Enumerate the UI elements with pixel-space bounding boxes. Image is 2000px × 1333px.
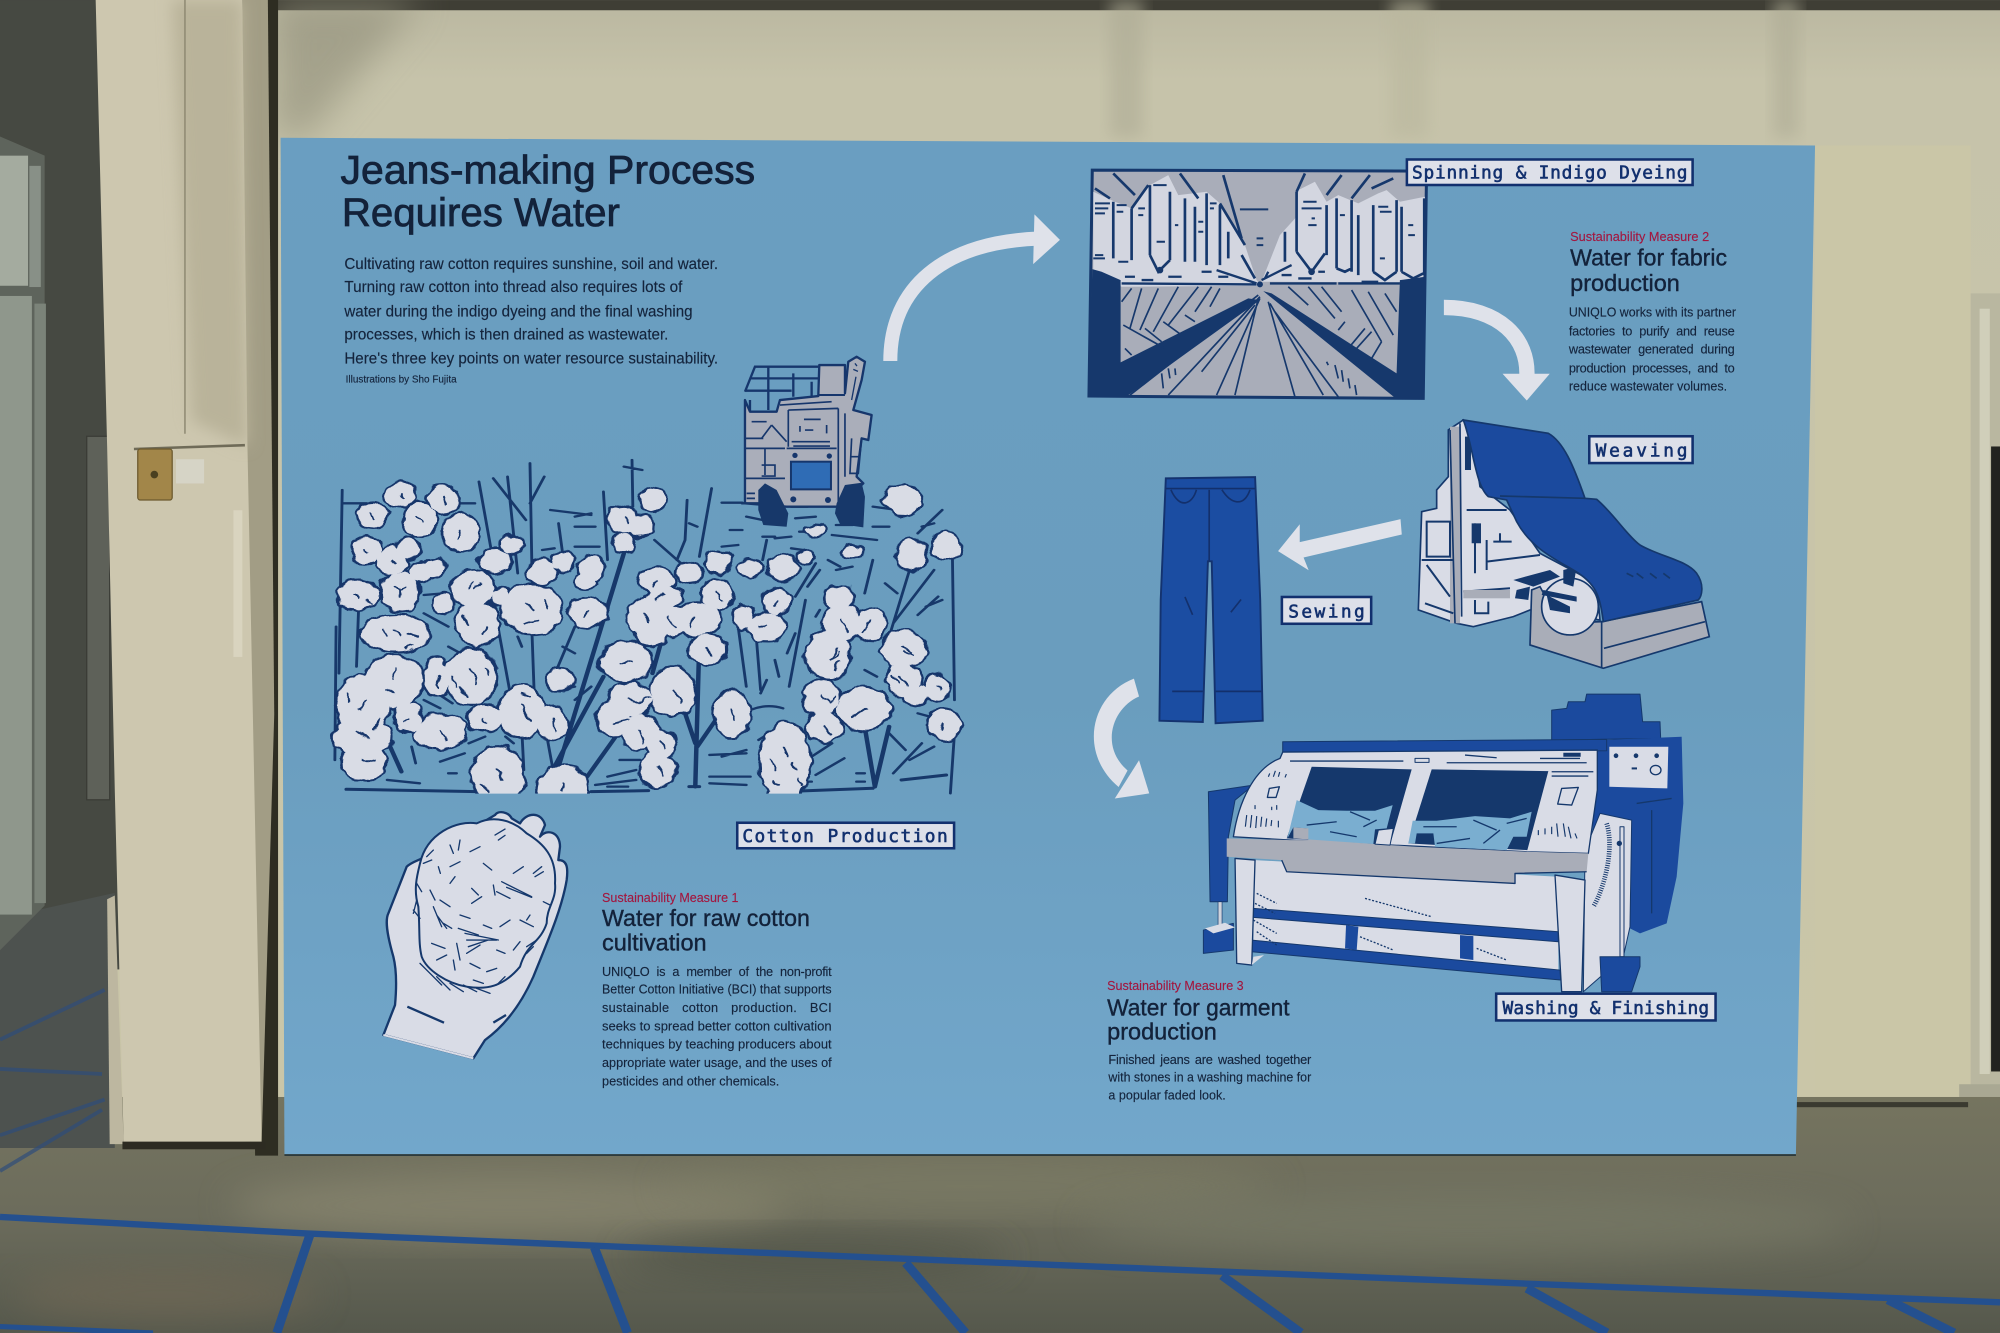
intro text: water during the indigo dyeing and the final washing xyxy=(343,303,693,320)
arrow: weaving to sewing xyxy=(1278,519,1402,570)
label: spinning and indigo dyeing: Spinning & Indigo Dyeing xyxy=(1412,163,1688,184)
text: sustainability measure 3 xyxy=(1107,978,1312,1103)
spinning towers xyxy=(1093,173,1425,287)
stems xyxy=(335,460,954,793)
text: sustainability measure 1: pesticides and other chemicals. xyxy=(602,1074,779,1089)
text: sustainability measure 2: Water for fabric xyxy=(1570,244,1727,270)
floor perspective lines xyxy=(1122,287,1397,397)
floor xyxy=(0,1097,2000,1333)
loom base xyxy=(1530,587,1709,668)
intro text xyxy=(343,256,718,386)
text: sustainability measure 2: production processes, and to xyxy=(1569,360,1735,375)
text: sustainability measure 3: production xyxy=(1107,1019,1217,1045)
text: sustainability measure 3: Water for garment xyxy=(1107,994,1290,1020)
arrow: spinning to weaving xyxy=(1444,307,1550,401)
text: sustainability measure 2: UNIQLO works with its partner xyxy=(1569,304,1737,319)
illustration: spinning and indigo dyeing factory xyxy=(1089,170,1427,398)
control panel xyxy=(1609,747,1668,788)
title: Jeans-making Process xyxy=(341,149,755,193)
text: sustainability measure 2 xyxy=(1568,229,1737,393)
text: sustainability measure 1 xyxy=(602,890,832,1089)
text: sustainability measure 3: Sustainability Measure 3 xyxy=(1107,978,1244,993)
text: sustainability measure 3: Finished jeans are washed together xyxy=(1108,1052,1312,1067)
text: sustainability measure 1: cultivation xyxy=(602,929,707,955)
illustration: jeans xyxy=(1159,477,1263,723)
fabric drape xyxy=(1463,420,1702,622)
text: sustainability measure 1: Sustainability Measure 1 xyxy=(602,890,739,905)
pillar xyxy=(96,0,278,1156)
text: sustainability measure 1: UNIQLO is a member of the non-profit xyxy=(602,964,832,979)
intro text: Cultivating raw cotton requires sunshine, soil and water. xyxy=(344,256,718,273)
text: sustainability measure 1: seeks to spread better cotton cultivation xyxy=(602,1019,832,1034)
machine legs xyxy=(1235,858,1255,965)
wall switch boxes xyxy=(138,449,204,500)
upper white panel xyxy=(1233,750,1597,853)
illustration: cotton field xyxy=(334,460,959,808)
floor tape in doorway xyxy=(0,990,105,1171)
grey strip xyxy=(1227,827,1588,883)
text: sustainability measure 1: techniques by teaching producers about xyxy=(602,1037,832,1052)
intro text: Here's three key points on water resource sustainability. xyxy=(344,351,718,368)
intro text: Turning raw cotton into thread also requires lots of xyxy=(344,279,683,296)
blue board xyxy=(281,138,1815,1154)
label: washing and finishing: Washing & Finishing xyxy=(1503,998,1709,1019)
text: sustainability measure 3: with stones in a washing machine for xyxy=(1107,1070,1312,1085)
text: sustainability measure 2: Sustainability Measure 2 xyxy=(1570,229,1709,244)
title xyxy=(341,149,755,235)
text: sustainability measure 2: factories to purify and reuse xyxy=(1569,324,1735,339)
text: sustainability measure 1: Better Cotton Initiative (BCI) that supports xyxy=(602,982,832,997)
text: sustainability measure 2: production xyxy=(1570,270,1680,296)
text: sustainability measure 3: a popular faded look. xyxy=(1108,1088,1226,1103)
left doorway and glass door xyxy=(0,0,121,1148)
lower white body xyxy=(1253,860,1558,970)
illustration: washing machine xyxy=(1203,694,1683,992)
arrow: cotton to spinning xyxy=(890,214,1060,361)
intro text: Illustrations by Sho Fujita xyxy=(346,375,457,386)
intro text: processes, which is then drained as wastewater. xyxy=(344,326,668,343)
arrow: sewing to washing xyxy=(1094,679,1149,799)
text: sustainability measure 1: appropriate water usage, and the uses of xyxy=(602,1055,832,1070)
label: weaving xyxy=(1589,436,1693,463)
label: weaving: Weaving xyxy=(1596,441,1688,462)
text: sustainability measure 2: wastewater generated during xyxy=(1568,341,1735,356)
text: sustainability measure 1: sustainable cotton production. BCI xyxy=(602,1000,832,1015)
text: sustainability measure 1: Water for raw cotton xyxy=(602,905,810,931)
floor tape grid xyxy=(0,1217,2000,1333)
title: Requires Water xyxy=(342,191,620,235)
text: sustainability measure 2: reduce wastewater volumes. xyxy=(1569,378,1727,393)
label: sewing: Sewing xyxy=(1288,601,1365,622)
illustration: harvester xyxy=(745,357,872,527)
illustration: hand holding cotton xyxy=(383,812,567,1058)
label: cotton production: Cotton Production xyxy=(742,826,948,847)
windows with jeans inside xyxy=(1287,767,1412,845)
cotton bolls xyxy=(334,483,959,808)
right door frame xyxy=(1815,145,2000,1112)
illustration: weaving loom xyxy=(1418,420,1709,668)
navy side blocks and road wedges xyxy=(1089,269,1426,398)
label: sewing xyxy=(1282,597,1371,624)
